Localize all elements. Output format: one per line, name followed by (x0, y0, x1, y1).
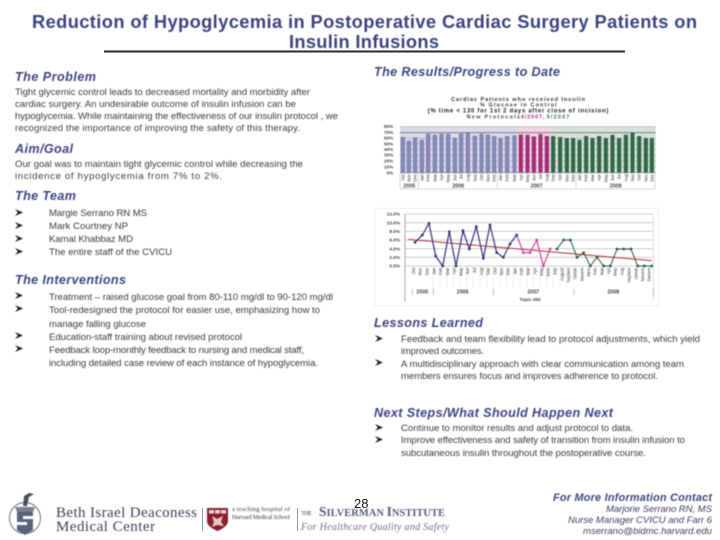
line chart: hypoglycemia rate with trend line: 2008 (607, 289, 619, 295)
panel: Aim/Goal: incidence of hypoglycemia from 7% to 2%. (15, 171, 222, 182)
line chart: hypoglycemia rate with trend line: Aug (619, 267, 624, 275)
line chart: hypoglycemia rate with trend line: Octob (573, 267, 578, 279)
panel: The Team: Margie Serrano RN MS (49, 208, 147, 219)
bar chart: percent glucose in control: Jan (498, 173, 503, 181)
heading: The Results/Progress to Date: The Results/Progress to Date (374, 65, 560, 79)
line chart: hypoglycemia rate with trend line: Oct (411, 267, 416, 274)
bar chart: percent glucose in control: Aug (465, 173, 470, 182)
line chart: hypoglycemia rate with trend line: May (539, 267, 544, 276)
bar chart: percent glucose in control: Oct (400, 173, 405, 181)
bar chart: percent glucose in control: 4/2007, (521, 114, 545, 120)
panel: Lessons Learned: improved outcomes. (401, 346, 484, 357)
panel: Next Steps: Continue to monitor results and adjust protocol to data. (401, 423, 633, 434)
line chart: hypoglycemia rate with trend line: Mar (599, 267, 604, 275)
line chart: hypoglycemia rate with trend line: Novem (579, 267, 584, 281)
panel: Next Steps: Next Steps/What Should Happen Next (374, 406, 614, 420)
line chart: hypoglycemia rate with trend line: 6.0% (389, 238, 401, 243)
bar chart: percent glucose in control: 30% (384, 153, 394, 158)
line chart: hypoglycemia rate with trend line: Octob (633, 267, 638, 279)
bar chart: percent glucose in control: May (525, 173, 530, 182)
line chart: hypoglycemia rate with trend line: Septem (627, 267, 632, 283)
bar chart: percent glucose in control: 0% (387, 170, 394, 175)
bar chart: percent glucose in control: Dec (649, 173, 654, 182)
panel: Next Steps (374, 406, 685, 459)
panel: The Interventions: Feedback loop-monthly feedback to nursing and medical staff, (49, 345, 304, 356)
bar chart: percent glucose in control: Feb (426, 173, 431, 181)
panel: The Team (15, 189, 172, 258)
bar chart: percent glucose in control: Jul (617, 174, 622, 180)
Harvard affiliation text: a teaching hospital of (232, 506, 291, 513)
panel: Lessons Learned: Feedback and team flexibility lead to protocol adjustments, which yield (401, 334, 700, 345)
bar chart: percent glucose in control: Mar (432, 173, 437, 181)
bar chart: percent glucose in control: Sep (630, 173, 635, 182)
bar chart: percent glucose in control: 2007 (531, 183, 543, 189)
panel: The Problem: The Problem (15, 70, 96, 84)
line chart: hypoglycemia rate with trend line: Dec (506, 267, 511, 275)
line chart: hypoglycemia rate with trend line (375, 208, 658, 306)
panel: Lessons Learned: members ensures focus and improves adherence to protocol. (401, 371, 658, 382)
bar chart: percent glucose in control: Feb (584, 173, 589, 181)
bar chart: percent glucose in control: May (446, 173, 451, 182)
panel: Next Steps: subcutaneous insulin throughout the postoperative course. (401, 448, 646, 459)
line chart: hypoglycemia rate with trend line: Decem (647, 267, 652, 281)
bar chart: percent glucose in control: (% time < 130 for 1st 2 days after close of incision) (428, 109, 608, 115)
panel: Lessons Learned: Lessons Learned (374, 316, 483, 330)
bar chart: percent glucose in control: Apr (439, 173, 444, 181)
bar chart: percent glucose in control: 2005 (403, 183, 415, 189)
panel: The Team: Kamal Khabbaz MD (49, 234, 133, 245)
line chart: hypoglycemia rate with trend line: Jun (465, 267, 470, 275)
line chart: hypoglycemia rate with trend line: 2005 (416, 289, 428, 295)
line chart: hypoglycemia rate with trend line: 12.0% (387, 212, 401, 217)
line chart: hypoglycemia rate with trend line: Jan (431, 267, 436, 275)
contact block (553, 492, 713, 537)
line chart: hypoglycemia rate with trend line: Mar (445, 267, 450, 275)
line chart: hypoglycemia rate with trend line: 0.0% (389, 264, 401, 269)
logo text: The Silverman Institute: For Healthcare Quality and Safety (300, 522, 450, 533)
line chart: hypoglycemia rate with trend line: May (459, 267, 464, 276)
panel: Lessons Learned: A multidisciplinary approach with clear communication among team (401, 359, 684, 370)
icon: medical center seal (10, 493, 40, 535)
bar chart: percent glucose in control: New Protocols (467, 114, 520, 120)
line chart: hypoglycemia rate with trend line: Dec (424, 267, 429, 275)
panel: The Team: The entire staff of the CVICU (49, 247, 172, 258)
bar chart: percent glucose in control: Apr (597, 173, 602, 181)
line chart: hypoglycemia rate with trend line: July (553, 267, 558, 275)
bar chart: percent glucose in control: Jan (419, 173, 424, 181)
title: Reduction of Hypoglycemia in Postoperative Cardiac Surgery Patients on (32, 11, 697, 32)
line chart: hypoglycemia rate with trend line: Nov (418, 267, 423, 275)
bar chart: percent glucose in control: 80% (384, 124, 394, 129)
logo text: The Silverman Institute: THE (301, 510, 312, 517)
panel: The Interventions: manage falling glucose (49, 319, 146, 330)
bar chart: percent glucose in control: Apr (518, 173, 523, 181)
line chart: hypoglycemia rate with trend line: 2.0% (389, 255, 401, 260)
bar chart: percent glucose in control: Cardiac Patients who received Insulin (451, 97, 586, 103)
line chart: hypoglycemia rate with trend line: Jan (512, 267, 517, 275)
panel: The Interventions: including detailed case review of each instance of hypoglycemia. (49, 358, 318, 369)
bar chart: percent glucose in control: 40% (384, 147, 394, 152)
divider (297, 508, 298, 531)
bar chart: percent glucose in control: Nov (406, 173, 411, 182)
icon: Harvard shield (207, 508, 228, 531)
line chart: hypoglycemia rate with trend line: 4.0% (389, 246, 401, 251)
panel: Aim/Goal (14, 142, 303, 182)
line chart: hypoglycemia rate with trend line: Oct (492, 267, 497, 274)
panel: Next Steps: Improve effectiveness and safety of transition from insulin infusion to (401, 435, 685, 446)
bar chart: percent glucose in control: 70% (384, 130, 394, 135)
bar chart: percent glucose in control: 10% (384, 164, 394, 169)
line chart: hypoglycemia rate with trend line: 10.0% (387, 220, 401, 225)
bar chart: percent glucose in control: Aug (623, 173, 628, 182)
bar chart: percent glucose in control: Sep (551, 173, 556, 182)
bar chart: percent glucose in control: Nov (485, 173, 490, 182)
line chart: hypoglycemia rate with trend line: Apr (452, 267, 457, 274)
title rule (104, 50, 625, 52)
contact block: Marjorie Serrano RN, MS (606, 504, 713, 515)
line chart: hypoglycemia rate with trend line: June (546, 267, 551, 277)
Harvard affiliation text (232, 506, 291, 521)
bar chart: percent glucose in control: Jul (459, 174, 464, 180)
panel: The Interventions: The Interventions (15, 273, 126, 287)
bar chart: percent glucose in control: Jan (577, 173, 582, 181)
bar chart: percent glucose in control: Jun (610, 173, 615, 181)
bar chart: percent glucose in control: Nov (643, 173, 648, 182)
page number: 28 (354, 496, 368, 511)
panel: Aim/Goal: Aim/Goal (14, 142, 74, 156)
line chart: hypoglycemia rate with trend line: Septem (566, 267, 571, 283)
panel: The Problem: recognized the importance of improving the safety of this therapy. (15, 123, 300, 134)
bar chart: percent glucose in control: Dec (492, 173, 497, 182)
bar chart: percent glucose in control: % Glucose in Control (480, 103, 557, 109)
line chart: hypoglycemia rate with trend line: Feb (593, 267, 598, 275)
panel: Lessons Learned (374, 316, 700, 382)
panel: The Interventions (15, 273, 333, 369)
panel: The Interventions: Tool-redesigned the protocol for easier use, emphasizing how to (49, 305, 320, 316)
line chart: hypoglycemia rate with trend line: Topic 456 (519, 297, 541, 302)
line chart: hypoglycemia rate with trend line: Feb (438, 267, 443, 275)
panel: The Interventions: Treatment – raised glucose goal from 80-110 mg/dl to 90-120 mg/dl (49, 292, 333, 303)
line chart: hypoglycemia rate with trend line: Apr (606, 267, 611, 274)
bar chart: percent glucose in control: Jun (452, 173, 457, 181)
bar chart: percent glucose in control: 50% (384, 141, 394, 146)
line chart: hypoglycemia rate with trend line: Novem (640, 267, 645, 281)
contact block: Nurse Manager CVICU and Farr 6 (568, 515, 713, 526)
bar chart: percent glucose in control: 2008 (610, 183, 622, 189)
logo text: Beth Israel Deaconess Medical Center: Beth Israel Deaconess (56, 505, 197, 521)
bar chart: percent glucose in control: 9/2007 (547, 114, 569, 120)
logo text: Beth Israel Deaconess Medical Center (56, 505, 197, 535)
line chart: hypoglycemia rate with trend line: 2007 (527, 289, 539, 295)
bar chart: percent glucose in control: May (603, 173, 608, 182)
line chart: hypoglycemia rate with trend line: Nov (499, 267, 504, 275)
bar chart: percent glucose in control: 2006 (452, 183, 464, 189)
bar chart: percent glucose in control: Mar (590, 173, 595, 181)
line chart: hypoglycemia rate with trend line: Aug (479, 267, 484, 275)
line chart: hypoglycemia rate with trend line: Janu (586, 267, 591, 277)
bar chart: percent glucose in control: 20% (384, 159, 394, 164)
panel: The Interventions: Education-staff training about revised protocol (49, 332, 242, 343)
bar chart: percent glucose in control: Oct (479, 173, 484, 181)
contact block: For More Information Contact (553, 492, 712, 504)
line chart: hypoglycemia rate with trend line: 2006 (457, 289, 469, 295)
title: Insulin Infusions (289, 31, 439, 52)
panel: Aim/Goal: Our goal was to maintain tight glycemic control while decreasing the (15, 159, 303, 170)
line chart: hypoglycemia rate with trend line: Apr (532, 267, 537, 274)
logo text: Beth Israel Deaconess Medical Center: Medical Center (56, 519, 155, 535)
bar chart: percent glucose in control: Mar (512, 173, 517, 181)
panel: The Problem: hypoglycemia. While maintaining the effectiveness of our insulin protocol , we (15, 111, 338, 122)
bar chart: percent glucose in control: Sep (472, 173, 477, 182)
panel: The Team: The Team (15, 189, 76, 203)
Harvard affiliation text: Harvard Medical School (232, 514, 290, 521)
line chart: hypoglycemia rate with trend line: Jul (472, 268, 477, 273)
line chart: hypoglycemia rate with trend line: August (559, 267, 564, 281)
line chart: hypoglycemia rate with trend line: Sep (486, 267, 491, 275)
logo text: The Silverman Institute: SILVERMAN INSTITUTE (319, 504, 445, 519)
bar chart: percent glucose in control: Nov (564, 173, 569, 182)
bar chart: percent glucose in control: Jun (531, 173, 536, 181)
panel: The Problem (15, 70, 338, 134)
divider (202, 508, 203, 531)
panel: The Team: Mark Courtney NP (49, 221, 128, 232)
bar chart: percent glucose in control: Dec (571, 173, 576, 182)
line chart: hypoglycemia rate with trend line: May (613, 267, 618, 276)
bar chart: percent glucose in control: Oct (558, 173, 563, 181)
contact block: mserrano@bidmc.harvard.edu (583, 526, 713, 537)
panel: The Problem: cardiac surgery. An undesirable outcome of insulin infusion can be (15, 99, 296, 110)
bar chart: percent glucose in control: Oct (637, 173, 642, 181)
bar chart: percent glucose in control: 60% (384, 136, 394, 141)
bar chart: percent glucose in control: Feb (505, 173, 510, 181)
bar chart: percent glucose in control: Jul (538, 174, 543, 180)
bar chart: percent glucose in control: Aug (544, 173, 549, 182)
title (32, 11, 697, 52)
logo text: The Silverman Institute (300, 504, 450, 533)
line chart: hypoglycemia rate with trend line: 8.0% (389, 229, 401, 234)
panel: The Problem: Tight glycemic control leads to decreased mortality and morbidity after (15, 87, 311, 98)
line chart: hypoglycemia rate with trend line: Mar (526, 267, 531, 275)
bar chart: percent glucose in control (384, 97, 656, 189)
bar chart: percent glucose in control: Dec (413, 173, 418, 182)
line chart: hypoglycemia rate with trend line: Feb (519, 267, 524, 275)
